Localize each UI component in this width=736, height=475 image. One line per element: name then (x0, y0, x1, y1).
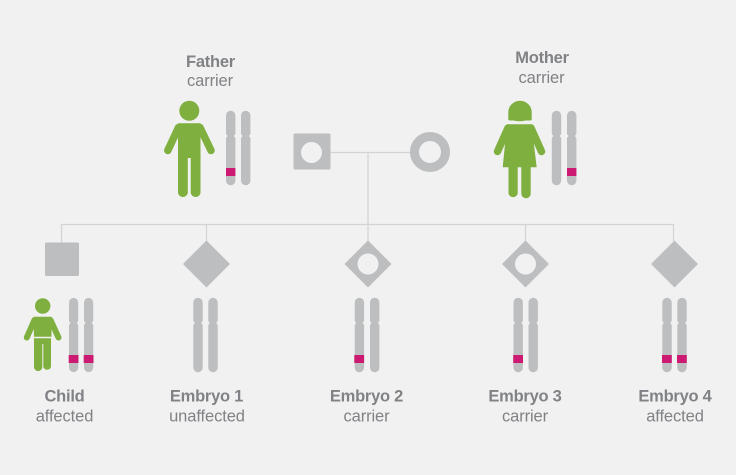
label: Embryo 1 unaffected (169, 388, 245, 426)
icon: embryo 3 chromosomes (513, 298, 538, 372)
heading: Father carrier (186, 53, 236, 90)
label: Embryo 3 carrier: carrier (502, 408, 549, 426)
label: Embryo 1 unaffected: unaffected (169, 408, 245, 426)
pedigree symbol: father carrier square (294, 134, 330, 170)
label: Child affected (36, 388, 93, 426)
pedigree symbol: child affected square (45, 242, 79, 276)
icon: child figure (27, 298, 58, 371)
label: Embryo 2 carrier: Embryo 2 (330, 388, 403, 406)
label: Embryo 4 affected: affected (646, 408, 704, 426)
pedigree symbol: embryo 2 carrier diamond (344, 240, 392, 288)
icon: father chromosomes (226, 111, 250, 185)
heading: Mother carrier (515, 49, 570, 87)
heading: Mother carrier: carrier (518, 69, 565, 87)
icon: father figure (168, 101, 211, 197)
label: Embryo 3 carrier (488, 388, 562, 426)
heading: Father carrier: carrier (187, 72, 234, 90)
icon: child chromosomes (69, 298, 94, 372)
pedigree symbol: embryo 4 diamond (651, 240, 698, 288)
heading: Mother carrier: Mother (515, 49, 570, 67)
pedigree symbol: embryo 1 diamond (183, 240, 230, 288)
label: Child affected: Child (44, 388, 84, 406)
label: Embryo 1 unaffected: Embryo 1 (170, 388, 243, 406)
icon: embryo 4 chromosomes (662, 298, 687, 372)
pedigree symbol: mother carrier circle (414, 136, 446, 168)
icon: embryo 1 chromosomes (193, 298, 218, 372)
icon: embryo 2 chromosomes (354, 298, 379, 372)
label: Embryo 2 carrier (330, 388, 403, 426)
label: Embryo 2 carrier: carrier (343, 408, 390, 426)
label: Embryo 4 affected (638, 388, 713, 426)
label: Child affected: affected (36, 408, 93, 426)
icon: mother figure (498, 101, 542, 198)
pedigree symbol: embryo 3 carrier diamond (502, 240, 549, 288)
icon: mother chromosomes (552, 111, 576, 185)
heading: Father carrier: Father (186, 53, 236, 71)
label: Embryo 4 affected: Embryo 4 (638, 388, 713, 406)
label: Embryo 3 carrier: Embryo 3 (488, 388, 562, 406)
